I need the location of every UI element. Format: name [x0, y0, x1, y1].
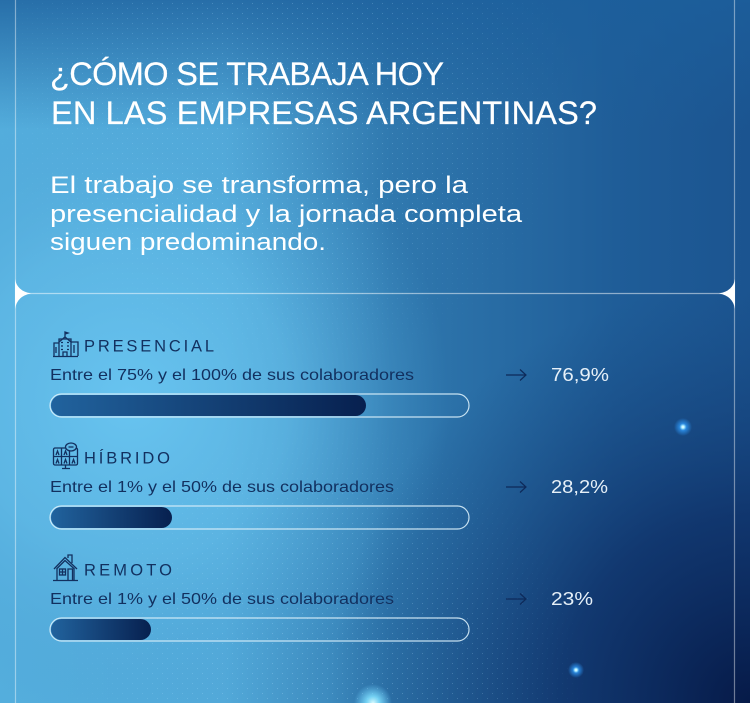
- title: EN LAS EMPRESAS ARGENTINAS?: [51, 95, 597, 131]
- arrow: [506, 594, 526, 604]
- row: hibrido: [50, 443, 608, 529]
- icon: house: [53, 555, 78, 580]
- text: hibrido description: Entre el 1% y el 50% de sus colaboradores: [50, 479, 394, 496]
- heading: hibrido: HÍBRIDO: [84, 448, 170, 468]
- text: presencial description: Entre el 75% y el 100% de sus colaboradores: [50, 367, 414, 384]
- row: remoto: [50, 555, 593, 641]
- bar: remoto: [50, 618, 469, 641]
- arrow: [506, 370, 526, 380]
- title: ¿CÓMO SE TRABAJA HOY: [50, 55, 444, 92]
- text: remoto description: Entre el 1% y el 50% de sus colaboradores: [50, 591, 394, 608]
- icon: school building: [53, 332, 78, 356]
- subtitle: [50, 172, 523, 256]
- glow lights: [354, 418, 692, 703]
- heading: remoto: REMOTO: [84, 562, 172, 580]
- icon: video call screen: [54, 443, 78, 468]
- title: [50, 55, 597, 131]
- value: remoto: 23%: [551, 588, 593, 609]
- subtitle: siguen predominando.: [50, 229, 326, 256]
- bar: hibrido: [50, 506, 469, 529]
- arrow: [506, 482, 526, 492]
- value: presencial: 76,9%: [551, 364, 609, 385]
- subtitle: El trabajo se transforma, pero la: [50, 172, 469, 199]
- bar: presencial: [50, 394, 469, 417]
- value: hibrido: 28,2%: [551, 476, 608, 497]
- subtitle: presencialidad y la jornada completa: [50, 201, 523, 228]
- row: presencial: [50, 332, 609, 417]
- heading: presencial: PRESENCIAL: [84, 338, 214, 356]
